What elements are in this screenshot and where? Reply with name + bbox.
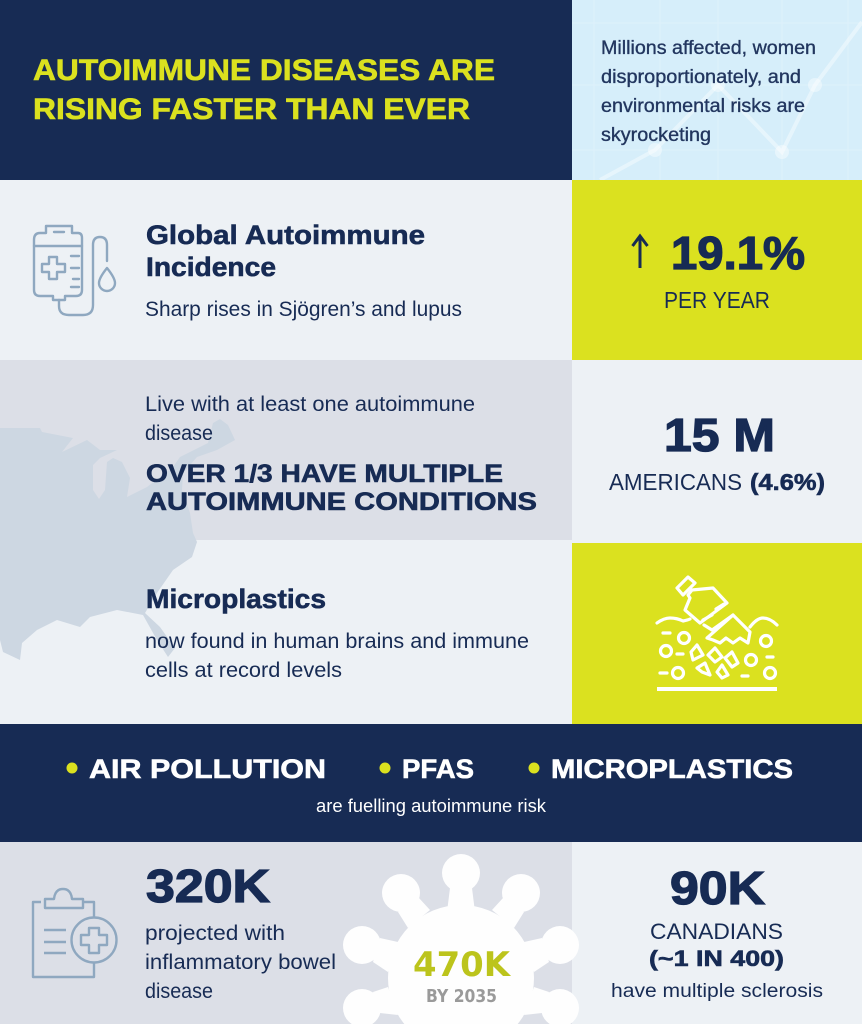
- stat label: AMERICANS: [609, 469, 742, 495]
- text: multiple conditions: [146, 460, 537, 516]
- heading: [146, 220, 425, 282]
- stat label: (~1 IN 400): [649, 946, 784, 971]
- chart background: [572, 0, 862, 180]
- stat label: [649, 919, 784, 971]
- panel: multiple sclerosis: [572, 842, 862, 1024]
- banner caption: are fuelling autoimmune risk: [316, 796, 547, 816]
- callout label: BY 2035: [426, 986, 497, 1007]
- text: prevalence: Live with at least one autoimmune: [145, 393, 475, 416]
- panel: microplastics background: [0, 540, 572, 724]
- text: multiple conditions: OVER 1/3 HAVE MULTIPLE: [146, 460, 503, 488]
- heading: Global Autoimmune: [146, 220, 425, 250]
- summary text: [601, 38, 816, 146]
- description: [145, 922, 336, 1003]
- icon: clipboard with cross: [33, 889, 116, 977]
- panel: americans left: [0, 360, 572, 540]
- text: microplastics description: cells at record levels: [145, 659, 342, 682]
- stat label: [609, 469, 825, 495]
- panel: microplastics icon: [572, 543, 862, 724]
- summary text: disproportionately, and: [601, 67, 801, 88]
- text: microplastics description: now found in human brains and immune: [145, 630, 529, 653]
- callout value: 470K: [413, 945, 512, 985]
- panel: header summary: [572, 0, 862, 180]
- risk: PFAS: PFAS: [402, 754, 474, 784]
- heading: Incidence: [146, 252, 276, 282]
- stat label: PER YEAR: [664, 287, 770, 313]
- panel: global incidence: [0, 180, 572, 360]
- stat value: 15 M: [664, 409, 775, 461]
- description: have multiple sclerosis: [611, 981, 823, 1002]
- stat label: (4.6%): [750, 469, 825, 495]
- summary text: Millions affected, women: [601, 38, 816, 59]
- panel: risk factors banner: [0, 724, 862, 842]
- title: [33, 54, 495, 126]
- summary text: skyrocketing: [601, 125, 711, 146]
- text: prevalence: [145, 393, 475, 445]
- description: disease: [145, 980, 213, 1003]
- description: projected with: [145, 922, 285, 945]
- icon: bottle and particles in soil: [657, 577, 777, 689]
- icon: IV bag: [34, 226, 115, 315]
- stat value: 19.1%: [671, 227, 805, 279]
- summary text: environmental risks are: [601, 96, 805, 117]
- panel: inflammatory bowel disease: [0, 842, 572, 1024]
- map: eastern United States: [0, 419, 235, 660]
- panel: 19.1% stat: [572, 180, 862, 360]
- description: inflammatory bowel: [145, 951, 336, 974]
- stat value: 320K: [146, 860, 270, 912]
- title: RISING FASTER THAN EVER: [33, 93, 470, 126]
- risk: air pollution: AIR POLLUTION: [89, 754, 326, 784]
- panel: header title: [0, 0, 572, 180]
- stat label: CANADIANS: [650, 919, 783, 944]
- panel: 15 M stat: [572, 360, 862, 540]
- icon: up arrow: [632, 236, 648, 268]
- text: microplastics heading: Microplastics: [146, 584, 326, 614]
- virus shape: [343, 854, 579, 1024]
- text: multiple conditions: AUTOIMMUNE CONDITIONS: [146, 488, 537, 516]
- stat value: 90K: [670, 862, 765, 914]
- virus callout: [343, 854, 579, 1024]
- description: Sharp rises in Sjögren’s and lupus: [145, 298, 462, 321]
- text: microplastics description: [145, 630, 529, 682]
- title: AUTOIMMUNE DISEASES ARE: [33, 54, 495, 87]
- risk: microplastics: MICROPLASTICS: [551, 754, 793, 784]
- text: prevalence: disease: [145, 422, 213, 445]
